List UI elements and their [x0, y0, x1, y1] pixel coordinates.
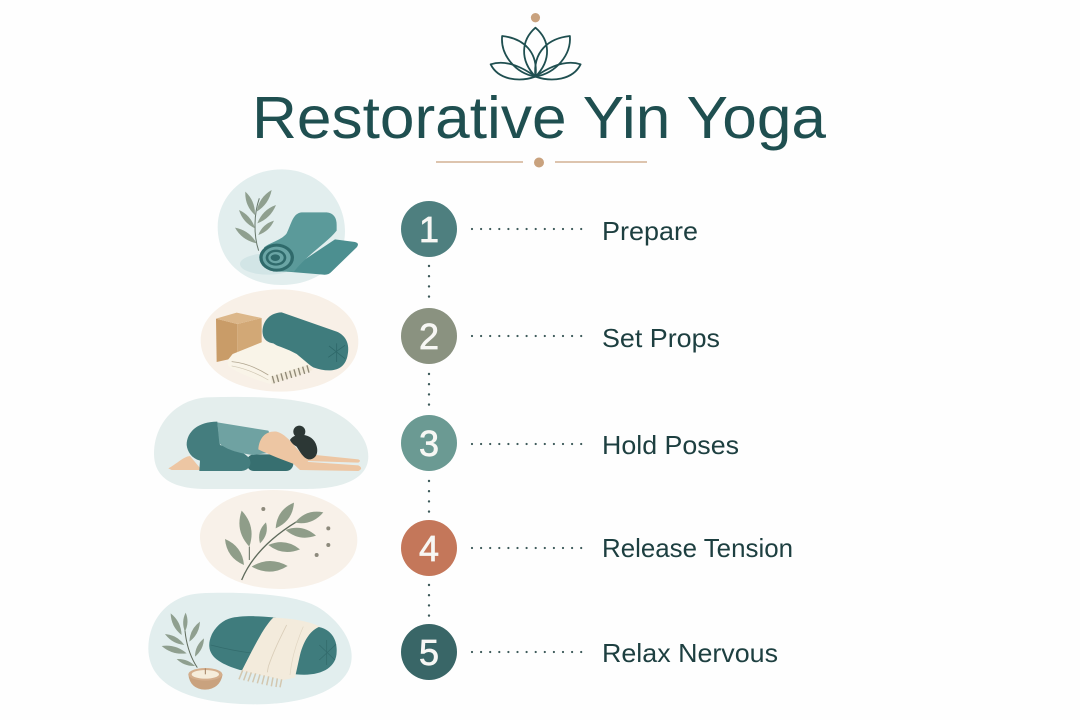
timeline connector dots	[428, 266, 430, 616]
step 3	[401, 415, 739, 471]
step 1	[401, 201, 698, 257]
icon: cork block	[216, 313, 262, 362]
number badge 1	[401, 201, 457, 257]
title divider	[436, 158, 647, 168]
panel: step 5 illustration, bolster and candle	[148, 593, 352, 704]
icon: bolster	[209, 616, 337, 675]
step 2	[401, 308, 720, 364]
step label: Release Tension	[602, 533, 793, 563]
icon: branch	[225, 503, 323, 580]
number badge 5: 5	[419, 632, 439, 673]
number badge 1: 1	[419, 209, 439, 250]
number badge 5	[401, 624, 457, 680]
bolster under chest	[247, 454, 293, 471]
icon: lotus logo	[491, 13, 581, 79]
number badge 4	[401, 520, 457, 576]
icon: candle	[188, 668, 223, 690]
number badge 4: 4	[419, 528, 439, 569]
icon: plant sprig	[162, 613, 204, 668]
icon: rolled mat	[259, 212, 358, 275]
icon: plant sprig	[235, 190, 276, 251]
title: Restorative Yin Yoga	[252, 85, 826, 151]
number badge 2: 2	[419, 316, 439, 357]
shoulder	[258, 432, 308, 465]
background blob	[154, 397, 368, 489]
torso	[217, 422, 278, 455]
number badge 2	[401, 308, 457, 364]
step label: Hold Poses	[602, 430, 739, 460]
number badge 3: 3	[419, 423, 439, 464]
figure in child's pose	[168, 422, 361, 471]
legs	[187, 422, 250, 471]
number badge 3	[401, 415, 457, 471]
step label: Prepare	[602, 216, 698, 246]
background blob	[218, 169, 345, 285]
lower arm	[290, 461, 361, 471]
panel: step 4 illustration, leafy branch	[200, 490, 357, 589]
panel: step 2 illustration, props	[201, 289, 358, 392]
upper arm	[300, 453, 360, 463]
step label: Set Props	[602, 323, 720, 353]
background blob	[201, 289, 358, 392]
background blob	[200, 490, 357, 589]
foot	[168, 456, 202, 470]
step label: Relax Nervous	[602, 638, 778, 668]
step 4	[401, 520, 793, 576]
background blob	[148, 593, 352, 704]
icon: folded blanket	[227, 342, 313, 384]
step 5	[401, 624, 778, 680]
hair and bun	[293, 426, 305, 438]
icon: draped blanket	[239, 618, 320, 687]
panel: step 3 illustration, child's pose	[154, 397, 368, 489]
panel: step 1 illustration, rolled yoga mat	[218, 169, 358, 285]
decorative dots	[261, 507, 330, 557]
icon: bolster	[263, 312, 348, 370]
